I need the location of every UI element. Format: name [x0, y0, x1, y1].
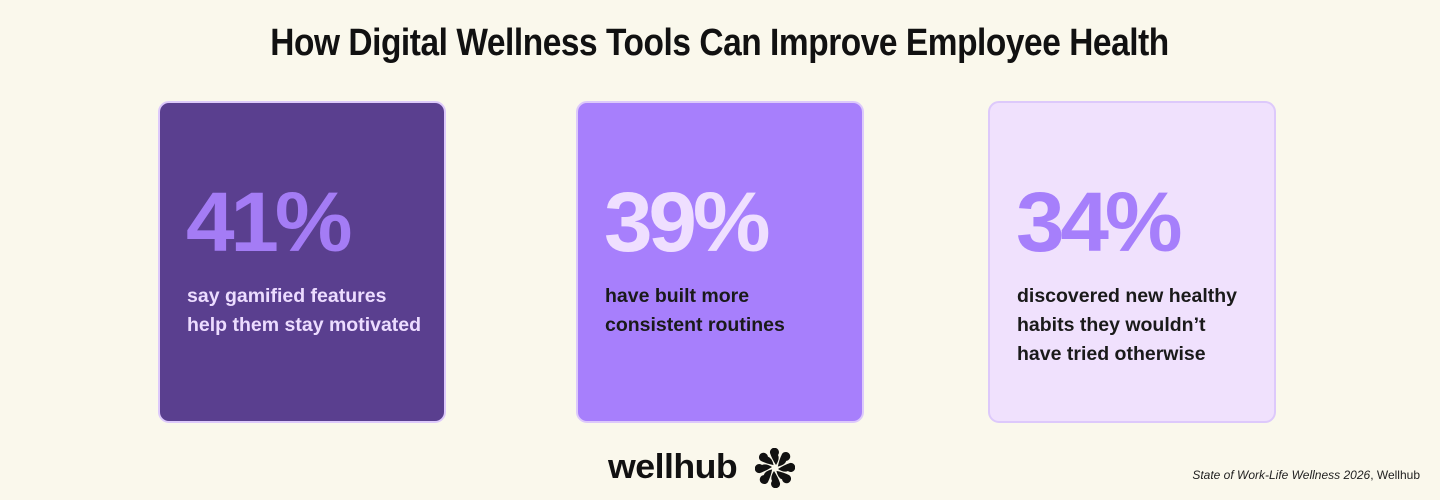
stat number: 39% — [604, 175, 766, 269]
panel: 34% — [988, 101, 1276, 423]
description — [605, 285, 785, 336]
panel: 41% — [158, 101, 446, 423]
stat number: 41% — [186, 175, 348, 269]
description: discovered new healthy — [1017, 285, 1237, 307]
description: consistent routines — [605, 314, 785, 336]
description: have tried otherwise — [1017, 343, 1206, 365]
source note: State of Work-Life Wellness 2026, Wellhub — [1192, 468, 1420, 482]
description — [187, 285, 421, 336]
description: habits they wouldn’t — [1017, 314, 1206, 336]
logo: wellhub: wellhub — [608, 448, 737, 486]
description: say gamified features — [187, 285, 386, 307]
panel: 39% — [576, 101, 864, 423]
description: have built more — [605, 285, 749, 307]
description — [1017, 285, 1237, 365]
title: How Digital Wellness Tools Can Improve Employee Health — [271, 22, 1169, 64]
logo: wellhub — [608, 448, 795, 488]
description: help them stay motivated — [187, 314, 421, 336]
stat number: 34% — [1016, 175, 1178, 269]
icon: swirl — [755, 448, 795, 488]
